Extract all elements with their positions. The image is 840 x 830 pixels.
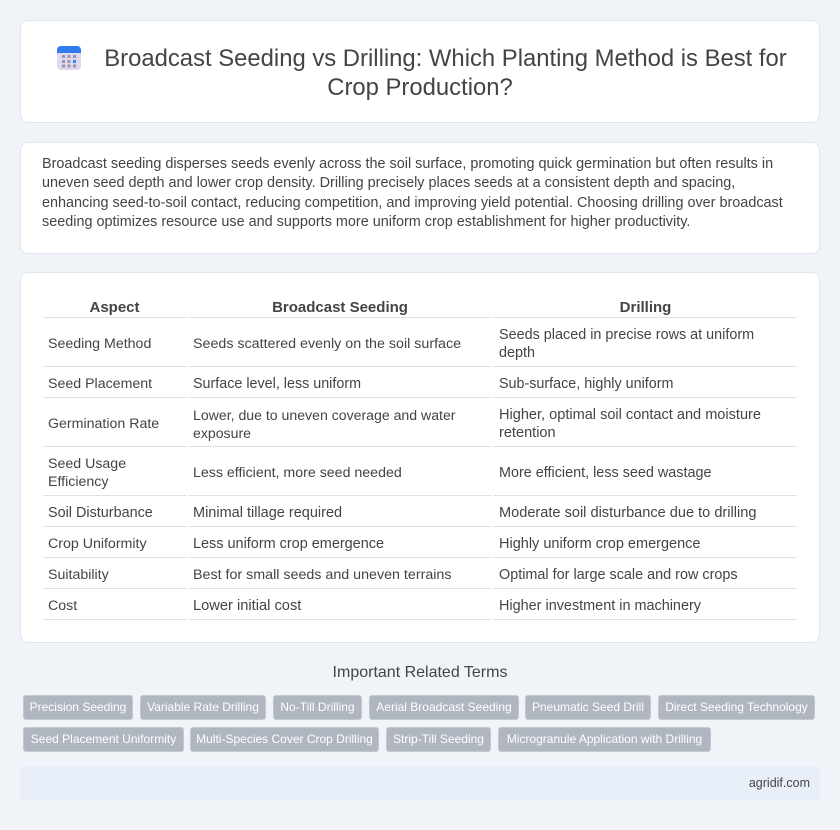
intro text: Broadcast seeding disperses seeds evenly across the soil surface, promoting quick germination but often results in — [42, 156, 773, 172]
comparison table: Surface level, less uniform — [193, 376, 361, 392]
tag: Strip-Till Seeding — [393, 732, 484, 746]
row: crop uniformity: Crop Uniformity — [48, 536, 147, 552]
header: aspect: Aspect — [89, 299, 140, 316]
row: seed placement: Seed Placement — [48, 376, 152, 392]
comparison table: Highly uniform crop emergence — [499, 536, 700, 552]
row: seeding method: Seeding Method — [48, 336, 151, 352]
intro text: enhancing seed-to-soil contact, reducing competition, and improving yield potential. Choosing drilling over broadcast — [42, 195, 783, 211]
comparison table: Best for small seeds and uneven terrains — [193, 567, 452, 583]
comparison table: Lower, due to uneven coverage and water — [193, 407, 455, 423]
comparison table panel — [20, 272, 820, 643]
tag: Aerial Broadcast Seeding — [376, 700, 512, 714]
tag: Pneumatic Seed Drill — [532, 700, 644, 714]
header panel — [20, 20, 820, 123]
title: Broadcast Seeding vs Drilling: Which Planting Method is Best for — [104, 45, 787, 72]
comparison table: Lower initial cost — [193, 598, 301, 614]
intro text — [42, 156, 783, 230]
row: seed usage efficiency: Efficiency — [48, 474, 108, 490]
row: cost: Cost — [48, 598, 77, 614]
header: drilling: Drilling — [620, 299, 671, 316]
related terms heading: Important Related Terms — [333, 664, 507, 681]
intro text: seeding optimizes resource use and supports more uniform crop establishment for higher productivity. — [42, 214, 690, 230]
title — [104, 45, 787, 101]
tag — [386, 727, 491, 752]
tag: Variable Rate Drilling — [147, 700, 259, 714]
footer bar — [20, 766, 820, 800]
comparison table: Moderate soil disturbance due to drilling — [499, 505, 756, 521]
tag: Multi-Species Cover Crop Drilling — [196, 732, 373, 746]
tag — [658, 695, 815, 720]
header: broadcast seeding: Broadcast Seeding — [272, 299, 408, 316]
tag — [23, 727, 184, 752]
tag — [525, 695, 651, 720]
tag — [498, 727, 711, 752]
tag — [23, 695, 133, 720]
comparison table: Higher investment in machinery — [499, 598, 701, 614]
tag — [140, 695, 266, 720]
comparison table: Seeds placed in precise rows at uniform — [499, 327, 754, 343]
row: suitability: Suitability — [48, 567, 109, 583]
title: Crop Production? — [327, 74, 513, 101]
tag: Direct Seeding Technology — [665, 700, 808, 714]
comparison table: Higher, optimal soil contact and moisture — [499, 407, 761, 423]
comparison table: Optimal for large scale and row crops — [499, 567, 738, 583]
comparison table: More efficient, less seed wastage — [499, 465, 712, 481]
tag: Precision Seeding — [30, 700, 126, 714]
tag — [190, 727, 379, 752]
comparison table: Minimal tillage required — [193, 505, 342, 521]
row: germination rate: Germination Rate — [48, 416, 159, 432]
comparison table — [43, 299, 797, 620]
comparison table: Sub-surface, highly uniform — [499, 376, 673, 392]
tag — [369, 695, 519, 720]
tag — [273, 695, 362, 720]
comparison table: depth — [499, 345, 535, 361]
intro text: uneven seed depth and lower crop density. Drilling precisely places seeds at a consistent depth and spacing, — [42, 175, 735, 191]
row: soil disturbance: Soil Disturbance — [48, 505, 153, 521]
footer source: agridif.com — [749, 776, 810, 790]
comparison table: retention — [499, 425, 556, 441]
intro panel — [20, 142, 820, 254]
row: seed usage efficiency — [48, 456, 126, 490]
related term tags — [23, 695, 815, 752]
row: seed usage efficiency: Seed Usage — [48, 456, 126, 472]
tag: Microgranule Application with Drilling — [507, 732, 702, 746]
tag: Seed Placement Uniformity — [31, 732, 176, 746]
comparison table: exposure — [193, 425, 251, 441]
comparison table: Less efficient, more seed needed — [193, 465, 402, 481]
icon: calendar — [57, 46, 81, 70]
tag: No-Till Drilling — [280, 700, 355, 714]
comparison table: Less uniform crop emergence — [193, 536, 384, 552]
comparison table: Seeds scattered evenly on the soil surface — [193, 336, 461, 352]
